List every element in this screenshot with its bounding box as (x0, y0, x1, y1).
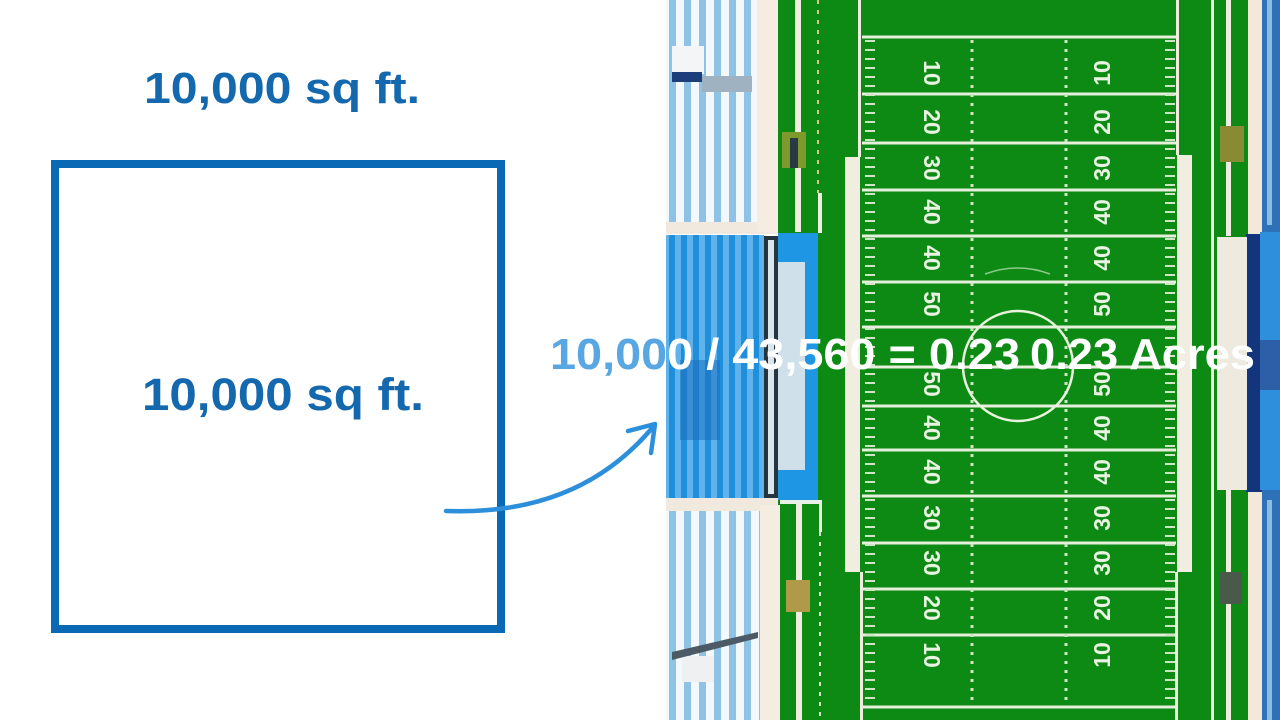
right yard numbers: 40 (1089, 245, 1115, 271)
lower dotted coaching line (819, 532, 821, 720)
right yard numbers: 10 (1089, 642, 1115, 668)
left yard numbers (919, 60, 945, 668)
left stands (666, 0, 780, 720)
sideline markings (795, 0, 1231, 720)
label inside square: 10,000 sq ft. (142, 369, 424, 420)
right yard numbers: 50 (1089, 291, 1115, 317)
right yard numbers: 20 (1089, 109, 1115, 135)
overlay result text: 0.23 Acres (1030, 330, 1255, 379)
faint outer arc (985, 268, 1050, 274)
right yard numbers: 40 (1089, 199, 1115, 225)
heading: 10,000 sq ft.: 10,000 sq ft. (144, 64, 420, 113)
left yard numbers: 30 (919, 155, 945, 181)
left yard numbers: 40 (919, 415, 945, 441)
yard lines (862, 37, 1176, 707)
right yard numbers: 30 (1089, 505, 1115, 531)
left yard numbers: 10 (919, 642, 945, 668)
panel: aerial photo of football stadium (666, 0, 1280, 720)
right stands (1217, 0, 1280, 720)
left yard numbers: 30 (919, 550, 945, 576)
right yard numbers: 40 (1089, 459, 1115, 485)
right yard numbers (1089, 60, 1115, 668)
dotted coaching line (817, 0, 819, 193)
left yard numbers: 40 (919, 199, 945, 225)
right yard numbers: 30 (1089, 550, 1115, 576)
left yard numbers: 10 (919, 60, 945, 86)
panel: square plot outline (55, 164, 501, 629)
right yard numbers: 20 (1089, 595, 1115, 621)
arrow from square to stadium (446, 424, 655, 511)
left bench area (764, 233, 820, 504)
left yard numbers: 40 (919, 245, 945, 271)
centre circle (963, 311, 1073, 421)
left yard numbers: 40 (919, 459, 945, 485)
left yard numbers: 20 (919, 109, 945, 135)
right yard numbers: 50 (1089, 371, 1115, 397)
right yard numbers: 30 (1089, 155, 1115, 181)
goal posts and pylons (782, 126, 1244, 612)
right yard numbers: 40 (1089, 415, 1115, 441)
turf (778, 0, 1250, 720)
overlay calculation text: 10,000 / 43,560 = 0.23 (550, 330, 1020, 379)
left yard numbers: 20 (919, 595, 945, 621)
left yard numbers: 30 (919, 505, 945, 531)
right yard numbers: 10 (1089, 60, 1115, 86)
hash marks (870, 40, 1170, 705)
left yard numbers: 50 (919, 371, 945, 397)
left yard numbers: 50 (919, 291, 945, 317)
